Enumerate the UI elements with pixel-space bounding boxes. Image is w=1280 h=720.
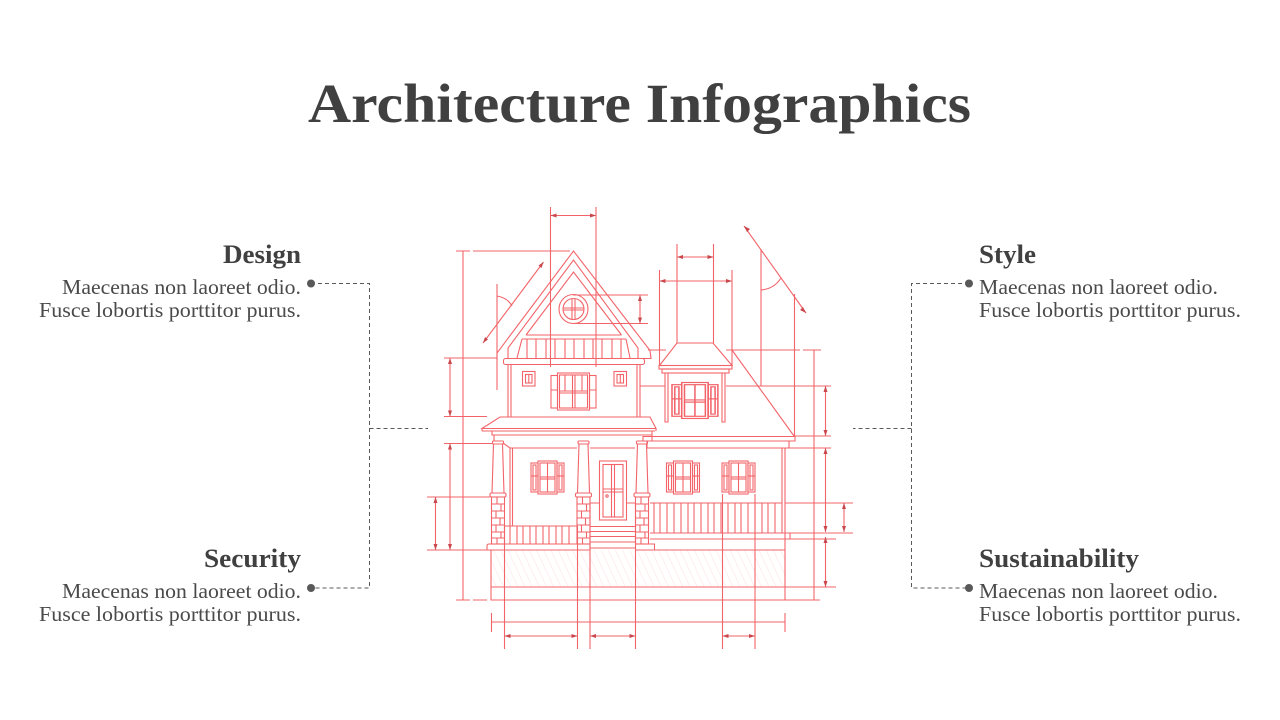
title: Architecture Infographics [308, 73, 971, 134]
panel: sustainability [979, 544, 1241, 626]
text block: design [39, 275, 301, 322]
porch roof [482, 417, 656, 441]
dimension: top width [550, 207, 596, 367]
text block: security: Maecenas non laoreet odio. [62, 579, 301, 603]
foundation hatch [492, 550, 784, 587]
ground floor walls and windows [503, 443, 755, 526]
dimension: roof slope and angle left [483, 262, 544, 390]
right wing roof and wall [643, 350, 795, 539]
main gable roof [497, 251, 651, 417]
front door [600, 461, 626, 520]
dimension: right side heights [640, 350, 853, 600]
round attic window [559, 294, 588, 324]
porch railings [504, 503, 782, 544]
dimension: bottom widths [492, 494, 785, 649]
plinth and foundation [487, 533, 790, 600]
panel: security [39, 544, 301, 626]
panel: design [39, 240, 302, 322]
text block: security [39, 579, 301, 626]
text block: design: Fusce lobortis porttitor purus. [39, 298, 301, 322]
dormer [659, 343, 732, 422]
heading: sustainability: Sustainability [979, 544, 1139, 573]
dimension: ground floor height [427, 444, 492, 550]
text block: sustainability [979, 579, 1241, 626]
left connector [307, 280, 428, 592]
heading: style: Style [979, 240, 1036, 269]
dimension: upper floor height [444, 358, 497, 416]
text block: style [979, 275, 1241, 322]
text block: style: Fusce lobortis porttitor purus. [979, 298, 1241, 322]
stairs [590, 526, 635, 548]
dimension: overall height left [456, 251, 570, 600]
text block: style: Maecenas non laoreet odio. [979, 275, 1218, 299]
panel: style [979, 240, 1241, 322]
porch pillars [490, 441, 650, 544]
text block: sustainability: Maecenas non laoreet odio. [979, 579, 1218, 603]
dimension: dormer widths [660, 244, 732, 365]
dimension: right roof slope and angle [744, 226, 806, 436]
dimension: attic window height [573, 295, 648, 324]
text block: design: Maecenas non laoreet odio. [62, 275, 301, 299]
house blueprint illustration [427, 207, 853, 649]
text block: security: Fusce lobortis porttitor purus. [39, 602, 301, 626]
text block: sustainability: Fusce lobortis porttitor purus. [979, 602, 1241, 626]
right connector [853, 280, 973, 592]
heading: security: Security [204, 544, 301, 573]
upper floor windows [522, 372, 626, 410]
heading: design: Design [223, 240, 302, 269]
